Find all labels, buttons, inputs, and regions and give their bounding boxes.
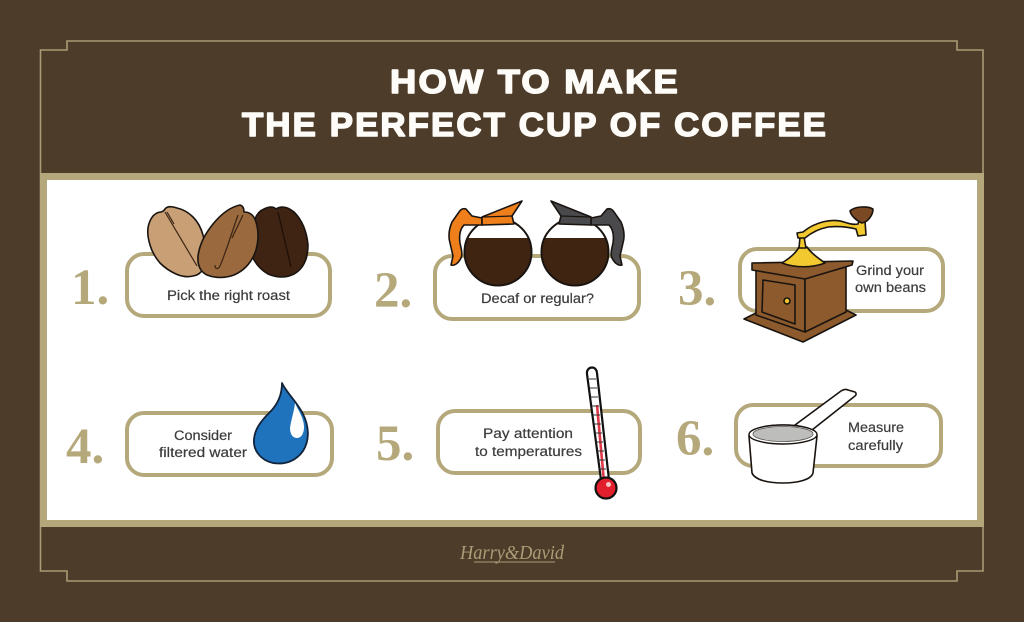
label <box>855 263 926 295</box>
number 1: 1. <box>71 260 109 316</box>
title: THE PERFECT CUP OF COFFEE <box>242 106 828 143</box>
label: own beans <box>855 280 926 295</box>
number 4: 4. <box>66 419 104 475</box>
label <box>475 426 582 459</box>
icon: coffee beans <box>148 205 308 278</box>
title: HOW TO MAKE <box>390 63 680 100</box>
label: Grind your <box>856 263 925 278</box>
number 6: 6. <box>676 411 714 467</box>
label: Pay attention <box>483 426 573 441</box>
text box 4 <box>127 413 332 475</box>
text box 1 <box>127 254 330 316</box>
number 2: 2. <box>374 263 412 319</box>
label: Decaf or regular? <box>481 291 594 306</box>
icon: black regular carafe <box>541 201 624 286</box>
number 3: 3. <box>678 261 716 317</box>
icon: coffee grinder <box>744 207 873 342</box>
text box 3 <box>740 249 943 311</box>
label: filtered water <box>159 445 248 460</box>
icon: orange decaf carafe <box>449 201 532 286</box>
label: to temperatures <box>475 444 582 459</box>
text box 5 <box>438 411 640 473</box>
label: Pick the right roast <box>167 288 290 303</box>
number 5: 5. <box>376 416 414 472</box>
icon: thermometer <box>587 368 616 498</box>
step 1: pick the right roast <box>71 205 330 316</box>
step 2: decaf or regular <box>374 201 639 319</box>
label: Consider <box>174 428 233 443</box>
step 4: consider filtered water <box>66 383 332 475</box>
text box 2 <box>435 256 639 319</box>
title <box>242 63 828 143</box>
step 6: measure carefully <box>676 389 941 483</box>
text box 6 <box>736 405 941 466</box>
logo: Harry & David: Harry&David <box>459 542 565 564</box>
step 3: grind your own beans <box>678 207 943 342</box>
icon: measuring scoop <box>749 389 856 483</box>
label <box>159 428 248 460</box>
label: Measure <box>848 420 904 435</box>
panel: steps <box>40 173 984 527</box>
label <box>848 420 904 453</box>
notched outer frame <box>40 41 983 581</box>
label: carefully <box>848 438 903 453</box>
icon: water drop <box>254 383 308 464</box>
step 5: pay attention to temperatures <box>376 368 640 498</box>
